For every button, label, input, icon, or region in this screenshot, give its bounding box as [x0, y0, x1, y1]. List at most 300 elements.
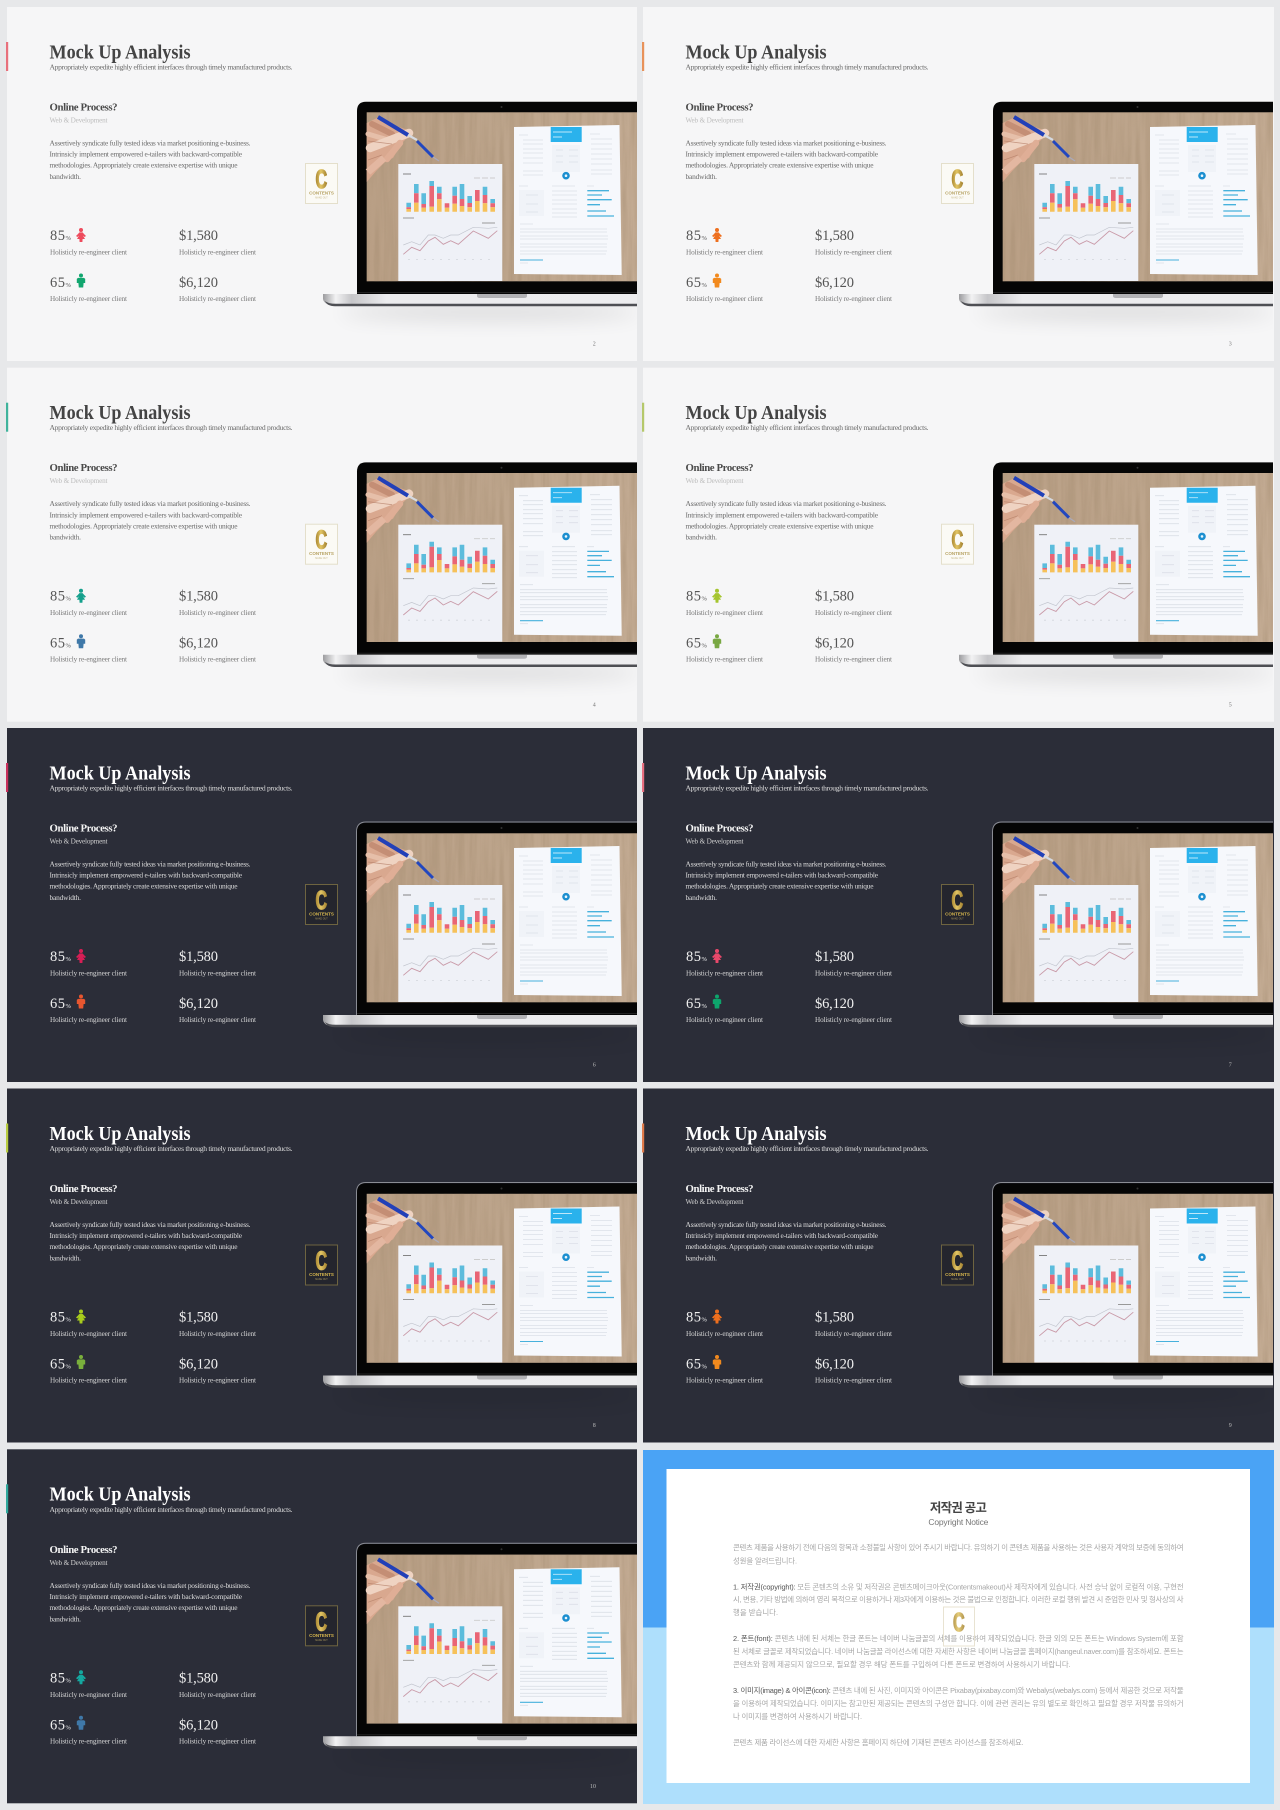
heading: Online Process? [50, 462, 118, 474]
stat: 65 percent [50, 274, 127, 303]
stat: dollar 6,120 [815, 1356, 892, 1384]
logo badge [306, 164, 338, 204]
notice section 3 image and icon: 나 이미지를 변경하여 사용하시기 바랍니다. [733, 1712, 862, 1721]
notice section 1 copyright: 시, 변용, 기타 방법에 의하여 영리 목적으로 이용하거나 제3자에게 이용하는 것은 불법으로 인정합니다. 이러한 로컬 행위 발견 시 준엄한 민사 및 형사상의 사 [733, 1595, 1184, 1604]
notice intro text: 성원을 알려드립니다. [733, 1556, 797, 1566]
stat: dollar 1,580: Holisticly re-engineer client [179, 248, 256, 256]
accent bar [642, 1124, 644, 1152]
laptop mockup [959, 462, 1276, 680]
laptop mockup [959, 1183, 1276, 1400]
stat: 65 percent: % [66, 1724, 72, 1731]
stat: 65 percent [686, 634, 763, 664]
stat: 65 percent [686, 274, 763, 303]
notice section 3 image and icon: 3. 이미지(image) & 아이콘(icon): 콘텐츠 내에 된 사진, 이미지와 아이콘은 Pixabay(pixabay.com)와 Webalys(webalys.com) 등에서 제공한 것으로 저작물 [733, 1686, 1184, 1695]
body text: methodologies. Appropriately create extensive expertise with unique [50, 1242, 238, 1251]
stat: 65 percent: 65 [50, 996, 65, 1012]
logo badge: MAKE OUT [951, 557, 964, 560]
logo badge: C [316, 164, 327, 194]
stat: 65 percent [50, 634, 127, 664]
logo badge: MAKE OUT [951, 1278, 964, 1281]
laptop outline [992, 1182, 1273, 1376]
body text: methodologies. Appropriately create extensive expertise with unique [686, 1242, 874, 1251]
heading: Online Process? [686, 102, 754, 114]
laptop outline [992, 822, 1273, 1015]
stat: 65 percent: Holisticly re-engineer client [50, 1016, 127, 1024]
subtitle: Appropriately expedite highly efficient interfaces through timely manufactured products. [686, 62, 929, 72]
stat: 85 percent: Holisticly re-engineer client [686, 248, 763, 256]
stat: 85 percent: 85 [686, 589, 701, 605]
stat: dollar 1,580: Holisticly re-engineer client [179, 609, 256, 617]
stat: 65 percent: % [702, 643, 708, 650]
laptop mockup [959, 102, 1276, 319]
notice subtitle: Copyright Notice [928, 1517, 989, 1527]
panel: slide 9 dark orange [642, 1088, 1276, 1442]
stat: dollar 6,120 [179, 996, 256, 1024]
stat: 65 percent: 65 [686, 275, 701, 291]
white card [666, 1469, 1250, 1783]
subtitle: Appropriately expedite highly efficient interfaces through timely manufactured products. [686, 1144, 929, 1153]
body text: methodologies. Appropriately create extensive expertise with unique [686, 882, 874, 891]
heading: Online Process? [686, 462, 754, 474]
stat: dollar 6,120 [815, 636, 892, 664]
stat: 85 percent: Holisticly re-engineer client [50, 1691, 127, 1699]
body text [686, 1220, 887, 1262]
stat: 65 percent [686, 994, 763, 1024]
title: Mock Up Analysis [50, 41, 191, 63]
stat: dollar 6,120: Holisticly re-engineer client [179, 1376, 256, 1384]
slide background [643, 1088, 1274, 1442]
slide background [7, 7, 637, 361]
stat: 85 percent: % [702, 1316, 708, 1324]
body text: bandwidth. [50, 893, 81, 902]
body text [686, 860, 887, 902]
stat: dollar 6,120 [179, 1717, 256, 1745]
logo badge: MAKE OUT [315, 557, 328, 560]
stat: dollar 1,580: $1,580 [179, 1670, 218, 1686]
stat: dollar 1,580 [179, 1310, 256, 1338]
notice section 2 font: 콘텐츠와 함께 제공되지 않으므로, 필요할 경우 해당 폰트를 구입하여 다른 폰트로 변경하여 사용하시기 바랍니다. [733, 1660, 1071, 1669]
logo badge: MAKE OUT [315, 918, 328, 920]
body text: bandwidth. [50, 533, 81, 542]
body text: Assertively syndicate fully tested ideas via market positioning e-business. [686, 1220, 887, 1229]
stat: dollar 6,120: $6,120 [815, 1356, 854, 1372]
stat: dollar 6,120 [179, 1356, 256, 1384]
stat: dollar 6,120: $6,120 [179, 275, 218, 291]
slide background [643, 728, 1274, 1082]
stat: dollar 6,120: $6,120 [179, 1356, 218, 1372]
body text: Assertively syndicate fully tested ideas via market positioning e-business. [50, 1220, 251, 1229]
logo badge: C [952, 885, 963, 915]
subtitle: Appropriately expedite highly efficient interfaces through timely manufactured products. [50, 62, 293, 72]
stat: dollar 1,580: $1,580 [179, 949, 218, 965]
stat: 85 percent [50, 1310, 127, 1338]
page number: 5 [1229, 702, 1232, 708]
subheading: Web & Development [686, 1198, 744, 1206]
body text: bandwidth. [50, 172, 81, 181]
stat: dollar 6,120: Holisticly re-engineer client [179, 656, 256, 664]
notice section 1 copyright: 행을 받습니다. [733, 1608, 778, 1617]
laptop outline [356, 1543, 637, 1736]
notice section 1 copyright: 1. 저작권(copyright): 모든 콘텐츠의 소유 및 저작권은 콘텐츠메이크아웃(Contentsmakeout)사 제작자에게 있습니다. 사전 승낙 없이 로컬적 이용, 구현전 [733, 1582, 1184, 1592]
stat: 65 percent: Holisticly re-engineer client [686, 1016, 763, 1024]
stat: dollar 6,120: $6,120 [815, 996, 854, 1012]
stat: dollar 6,120 [179, 636, 256, 664]
page number: 9 [1229, 1423, 1232, 1429]
stat: dollar 6,120: Holisticly re-engineer client [815, 656, 892, 664]
panel: slide 5 light lime [642, 368, 1276, 722]
blue upper background [643, 1450, 1274, 1628]
page number: 4 [593, 702, 596, 708]
subheading: Web & Development [50, 477, 108, 485]
stat: dollar 6,120: Holisticly re-engineer client [815, 1016, 892, 1024]
stat: 85 percent [50, 589, 127, 617]
notice section 3 image and icon: 을 이용하여 제작되었습니다. 이미지는 참고만된 제공되는 콘텐츠의 구성만 합니다. 이에 관련 권리는 유의 별도로 확인하고 필요할 경우 저작물 유의하거 [733, 1699, 1184, 1708]
panel: slide 8 dark lime [6, 1088, 640, 1442]
stat: dollar 1,580: $1,580 [179, 228, 218, 244]
subtitle: Appropriately expedite highly efficient interfaces through timely manufactured products. [50, 1144, 293, 1153]
stat: dollar 1,580: Holisticly re-engineer client [815, 609, 892, 617]
subheading: Web & Development [686, 838, 744, 846]
panel: slide 10 dark teal [6, 1449, 640, 1803]
logo badge: C [316, 885, 327, 915]
slide background [643, 7, 1274, 361]
title: Mock Up Analysis [50, 1123, 191, 1145]
stat: 85 percent [686, 1310, 763, 1338]
stat: 65 percent: 65 [686, 636, 701, 652]
subheading: Web & Development [50, 116, 108, 124]
title: Mock Up Analysis [50, 1484, 191, 1506]
logo badge: CONTENTS [309, 912, 334, 916]
page number: 10 [590, 1784, 596, 1790]
stat: dollar 1,580 [179, 1670, 256, 1699]
body text: bandwidth. [50, 1614, 81, 1623]
stat: 85 percent: Holisticly re-engineer client [50, 248, 127, 256]
logo badge: MAKE OUT [951, 918, 964, 920]
stat: 65 percent: 65 [50, 275, 65, 291]
stat: 65 percent: % [702, 1003, 708, 1010]
notice section 3 image and icon [733, 1686, 1184, 1721]
laptop mockup [323, 462, 640, 680]
stat: dollar 6,120 [179, 275, 256, 303]
pale blue lower background [643, 1628, 1274, 1804]
laptop outline [356, 822, 637, 1015]
stat: dollar 6,120: Holisticly re-engineer client [815, 295, 892, 303]
laptop outline [356, 1182, 637, 1376]
slide background [7, 1449, 637, 1803]
notice intro text: 콘텐츠 제품을 사용하기 전에 다음의 항목과 소정불일 사항이 있어 주시기 바랍니다. 유의하기 이 콘텐츠 제품을 사용하는 것은 사용자 계약의 보증에 동의하여 [733, 1543, 1184, 1552]
page number: 8 [593, 1423, 596, 1429]
body text [50, 1220, 251, 1262]
stat: dollar 6,120: $6,120 [179, 636, 218, 652]
stat: 65 percent: 65 [50, 1717, 65, 1733]
stat: dollar 1,580: $1,580 [815, 1310, 854, 1326]
page number: 2 [593, 342, 596, 348]
body text: methodologies. Appropriately create extensive expertise with unique [50, 882, 238, 891]
logo badge: MAKE OUT [315, 196, 328, 200]
body text: methodologies. Appropriately create extensive expertise with unique [50, 161, 238, 170]
stat: 65 percent: 65 [50, 1356, 65, 1372]
heading: Online Process? [50, 1183, 118, 1195]
stat: 85 percent [50, 949, 127, 978]
body text: Assertively syndicate fully tested ideas via market positioning e-business. [686, 138, 887, 148]
accent bar [642, 42, 644, 71]
body text [50, 499, 251, 542]
subtitle: Appropriately expedite highly efficient interfaces through timely manufactured products. [50, 784, 293, 792]
title: Mock Up Analysis [686, 41, 827, 63]
accent bar [6, 42, 8, 71]
laptop mockup [323, 1183, 640, 1400]
stat: 85 percent: 85 [686, 949, 701, 965]
logo badge [942, 884, 974, 924]
subtitle: Appropriately expedite highly efficient interfaces through timely manufactured products. [50, 1505, 293, 1514]
stat: 85 percent: 85 [50, 1310, 65, 1326]
accent bar [6, 1484, 8, 1513]
body text: Intrinsicly implement empowered e-tailers with backward-compatible [686, 871, 879, 880]
body text [686, 138, 887, 181]
logo badge [306, 1245, 338, 1285]
stat: dollar 6,120: Holisticly re-engineer client [179, 1737, 256, 1745]
stat: 85 percent [50, 228, 127, 256]
logo badge: C [952, 164, 963, 194]
stat: dollar 6,120: Holisticly re-engineer client [815, 1376, 892, 1384]
stat: dollar 1,580 [815, 589, 892, 617]
page number: 3 [1229, 342, 1232, 348]
logo badge [306, 524, 338, 564]
stat: dollar 6,120: $6,120 [179, 996, 218, 1012]
stat: 85 percent [686, 949, 763, 978]
stat: 85 percent: 85 [50, 949, 65, 965]
stat: dollar 1,580 [179, 228, 256, 256]
stat: 65 percent: Holisticly re-engineer client [50, 656, 127, 664]
body text: Assertively syndicate fully tested ideas via market positioning e-business. [50, 860, 251, 868]
subtitle: Appropriately expedite highly efficient interfaces through timely manufactured products. [686, 784, 929, 792]
laptop mockup [323, 823, 640, 1040]
body text: Assertively syndicate fully tested ideas via market positioning e-business. [686, 860, 887, 868]
subheading: Web & Development [50, 838, 108, 846]
logo badge: MAKE OUT [315, 1639, 328, 1642]
stat: dollar 1,580: Holisticly re-engineer client [179, 1330, 256, 1338]
notice logo watermark [944, 1607, 974, 1646]
stat: 85 percent: % [66, 596, 72, 603]
stat: 85 percent: 85 [686, 1310, 701, 1326]
accent bar [642, 763, 644, 792]
stat: dollar 6,120: Holisticly re-engineer client [179, 1016, 256, 1024]
logo badge [942, 1245, 974, 1285]
subheading: Web & Development [686, 477, 744, 485]
body text: bandwidth. [686, 172, 717, 181]
panel: slide 4 light teal [6, 368, 640, 722]
notice intro text [733, 1543, 1184, 1566]
stat: 65 percent: 65 [50, 636, 65, 652]
logo badge: C [316, 1245, 327, 1276]
panel: copyright notice [643, 1450, 1274, 1804]
stat: dollar 1,580: Holisticly re-engineer client [179, 970, 256, 978]
stat: dollar 1,580 [815, 949, 892, 978]
accent bar [6, 1124, 8, 1152]
body text: methodologies. Appropriately create extensive expertise with unique [686, 161, 874, 170]
stat: dollar 6,120: $6,120 [815, 275, 854, 291]
stat: dollar 1,580 [815, 228, 892, 256]
stat: 65 percent: % [702, 282, 708, 289]
logo badge: C [316, 525, 327, 555]
body text: Intrinsicly implement empowered e-tailers with backward-compatible [50, 510, 243, 519]
logo badge: C [952, 1245, 963, 1276]
stat: dollar 1,580 [815, 1310, 892, 1338]
body text: Intrinsicly implement empowered e-tailers with backward-compatible [50, 150, 243, 159]
stat: 65 percent [50, 1355, 127, 1384]
stat: 65 percent: % [702, 1364, 708, 1370]
stat: dollar 1,580: $1,580 [815, 589, 854, 605]
stat: dollar 6,120 [815, 275, 892, 303]
stat: dollar 1,580 [179, 589, 256, 617]
stat: 85 percent: % [702, 956, 708, 963]
stat: dollar 1,580: Holisticly re-engineer client [815, 1330, 892, 1338]
stat: dollar 1,580: Holisticly re-engineer client [815, 970, 892, 978]
logo badge: C [952, 525, 963, 555]
body text: Intrinsicly implement empowered e-tailers with backward-compatible [50, 1592, 243, 1601]
stat: 65 percent: % [66, 282, 72, 289]
body text: bandwidth. [686, 1254, 717, 1262]
stat: 85 percent: % [66, 1316, 72, 1324]
logo badge [942, 524, 974, 564]
logo badge: CONTENTS [309, 1633, 334, 1638]
heading: Online Process? [50, 1544, 118, 1556]
stat: 85 percent: Holisticly re-engineer client [686, 970, 763, 978]
logo badge: C [316, 1606, 327, 1636]
stat: 85 percent: Holisticly re-engineer client [686, 609, 763, 617]
body text: Assertively syndicate fully tested ideas via market positioning e-business. [686, 499, 887, 508]
page number: 7 [1229, 1063, 1232, 1069]
stat: 65 percent: Holisticly re-engineer client [686, 656, 763, 664]
stat: dollar 1,580: $1,580 [179, 589, 218, 605]
heading: Online Process? [686, 822, 754, 834]
heading: Online Process? [686, 1183, 754, 1195]
body text: Intrinsicly implement empowered e-tailers with backward-compatible [50, 871, 243, 880]
laptop mockup [323, 1544, 640, 1761]
body text [50, 138, 251, 181]
stat: 85 percent: 85 [50, 1670, 65, 1686]
subheading: Web & Development [50, 1198, 108, 1206]
stat: 85 percent: Holisticly re-engineer client [50, 970, 127, 978]
stat: dollar 6,120 [815, 996, 892, 1024]
laptop mockup [323, 102, 640, 319]
stat: dollar 1,580 [179, 949, 256, 978]
title: Mock Up Analysis [50, 402, 191, 424]
body text: Assertively syndicate fully tested ideas via market positioning e-business. [50, 499, 251, 508]
stat: dollar 6,120: $6,120 [815, 636, 854, 652]
panel: slide 6 dark crimson [6, 728, 640, 1082]
logo badge: CONTENTS [309, 190, 334, 196]
logo badge: MAKE OUT [951, 196, 964, 200]
title: Mock Up Analysis [686, 1123, 827, 1145]
stat: 65 percent: Holisticly re-engineer client [50, 1737, 127, 1745]
stat: dollar 1,580: $1,580 [815, 228, 854, 244]
logo badge [942, 164, 974, 204]
accent bar [642, 403, 644, 432]
stat: dollar 1,580: $1,580 [179, 1310, 218, 1326]
stat: 85 percent: 85 [50, 228, 65, 244]
heading: Online Process? [50, 822, 118, 834]
logo badge [306, 1606, 338, 1646]
body text: methodologies. Appropriately create extensive expertise with unique [50, 521, 238, 530]
stat: 65 percent [686, 1355, 763, 1384]
stat: 85 percent: % [702, 596, 708, 603]
heading: Online Process? [50, 102, 118, 114]
stat: 85 percent: % [702, 235, 708, 242]
panel: slide 2 light red [6, 7, 640, 361]
body text: Assertively syndicate fully tested ideas via market positioning e-business. [50, 138, 251, 148]
stat: 65 percent: Holisticly re-engineer client [50, 1376, 127, 1384]
notice section 2 font: 2. 폰트(font): 콘텐츠 내에 된 서체는 한글 폰트는 네이버 나눔글꼴의 서체를 이용하여 제작되었습니다. 한글 외의 모든 폰트는 Windows System에 포함 [733, 1634, 1184, 1643]
body text [686, 499, 887, 542]
stat: 65 percent: 65 [686, 996, 701, 1012]
stat: 65 percent: Holisticly re-engineer client [50, 295, 127, 303]
panel: slide 3 light orange [642, 7, 1276, 361]
logo badge: CONTENTS [945, 912, 970, 916]
subheading: Web & Development [686, 116, 744, 124]
logo badge: CONTENTS [945, 190, 970, 196]
logo badge: CONTENTS [309, 551, 334, 556]
stat: 65 percent: 65 [686, 1356, 701, 1372]
slide background [7, 1088, 637, 1442]
body text: methodologies. Appropriately create extensive expertise with unique [686, 521, 874, 530]
notice closing line: 콘텐츠 제품 라이선스에 대한 자세한 사항은 홈페이지 하단에 기재된 콘텐츠 라이선스를 참조하세요. [733, 1738, 1024, 1747]
body text [50, 860, 251, 902]
logo badge: CONTENTS [945, 1272, 970, 1277]
slide background [643, 368, 1274, 722]
body text: methodologies. Appropriately create extensive expertise with unique [50, 1603, 238, 1612]
slide background [7, 368, 637, 722]
stat: dollar 1,580: $1,580 [815, 949, 854, 965]
body text: Intrinsicly implement empowered e-tailers with backward-compatible [50, 1231, 243, 1240]
stat: 65 percent [50, 1716, 127, 1745]
notice section 2 font: 된 서체로 글꼴로 제작되었습니다. 네이버 나눔글꼴 라이선스에 대한 자세한 사항은 네이버 나눔글꼴 홈페이지(hangeul.naver.com)를 참조하세요. 폰트는 [733, 1647, 1184, 1656]
page number: 6 [593, 1063, 596, 1069]
logo badge: CONTENTS [309, 1272, 334, 1277]
logo badge: CONTENTS [945, 551, 970, 556]
body text: Intrinsicly implement empowered e-tailers with backward-compatible [686, 150, 879, 159]
slide background [7, 728, 637, 1082]
title: Mock Up Analysis [50, 762, 191, 784]
stat: 65 percent: % [66, 1364, 72, 1370]
stat: dollar 1,580: Holisticly re-engineer client [815, 248, 892, 256]
body text: Intrinsicly implement empowered e-tailers with backward-compatible [686, 1231, 879, 1240]
body text: bandwidth. [50, 1254, 81, 1262]
stat: 85 percent [50, 1670, 127, 1699]
accent bar [6, 763, 8, 792]
stat: 85 percent: Holisticly re-engineer client [50, 609, 127, 617]
stat: dollar 6,120: $6,120 [179, 1717, 218, 1733]
stat: dollar 6,120: Holisticly re-engineer client [179, 295, 256, 303]
notice section 2 font [733, 1634, 1184, 1669]
logo badge: MAKE OUT [315, 1278, 328, 1281]
stat: dollar 1,580: Holisticly re-engineer client [179, 1691, 256, 1699]
subheading: Web & Development [50, 1559, 108, 1567]
stat: 65 percent: % [66, 1003, 72, 1010]
stat: 85 percent: % [66, 1677, 72, 1684]
notice section 1 copyright [733, 1582, 1184, 1617]
panel: slide 7 dark rose [642, 728, 1276, 1082]
stat: 85 percent: Holisticly re-engineer client [686, 1330, 763, 1338]
body text: bandwidth. [686, 533, 717, 542]
body text [50, 1581, 251, 1623]
accent bar [6, 403, 8, 432]
stat: 85 percent [686, 228, 763, 256]
stat: 85 percent: Holisticly re-engineer client [50, 1330, 127, 1338]
stat: 85 percent [686, 589, 763, 617]
body text: bandwidth. [686, 893, 717, 902]
title: Mock Up Analysis [686, 402, 827, 424]
